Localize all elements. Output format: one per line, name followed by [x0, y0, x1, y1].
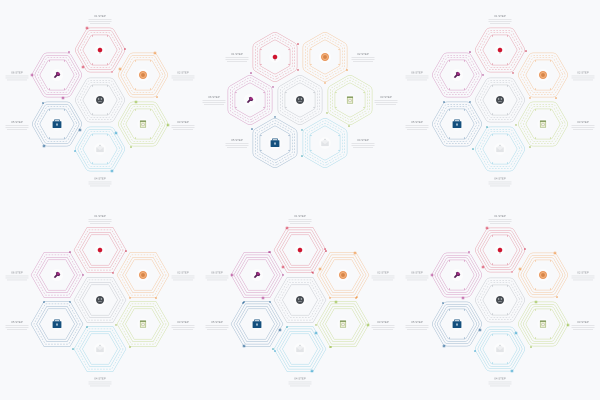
connector dots: [430, 226, 570, 373]
connector dots: [30, 26, 170, 173]
step label 06: [202, 95, 226, 105]
step label 02: [372, 270, 394, 280]
hexagon: bottom, teal: [475, 327, 525, 371]
hexagon: top, red: [475, 228, 525, 272]
step label 05: 05 STEP: [411, 120, 423, 124]
step label 06: [406, 270, 428, 280]
step label 06: 06 STEP: [411, 270, 423, 274]
step label 04: [88, 176, 112, 186]
step label 04: [288, 376, 312, 386]
hexagon: bottom, teal: [74, 326, 126, 372]
hexagon: upper right, orange: [518, 53, 568, 97]
step label 01: [88, 214, 112, 224]
step label 05: 05 STEP: [11, 120, 23, 124]
step label 02: 02 STEP: [177, 270, 189, 274]
step label 03: 03 STEP: [177, 320, 189, 324]
step label 01: [288, 214, 312, 224]
hexagon: upper left, purple: [32, 53, 82, 97]
connector dots: [230, 226, 370, 373]
step label 01: 01 STEP: [94, 214, 106, 218]
step label 03: [172, 320, 194, 330]
hexagon: lower right, green: [317, 302, 369, 346]
step label 05: [406, 120, 428, 130]
step label 03: [572, 320, 594, 330]
step label 05: [206, 320, 228, 330]
step label 01: [488, 14, 512, 24]
hexagon: bottom right, teal: [303, 118, 347, 168]
step label 01: [226, 52, 248, 62]
step label 03: [372, 320, 394, 330]
step label 06: [6, 270, 28, 280]
hexagon: right, green: [328, 75, 372, 125]
step label 03: 03 STEP: [377, 320, 389, 324]
hexagon: upper right, orange: [118, 53, 168, 97]
step label 04: 04 STEP: [357, 138, 369, 142]
hexagon: lower left, blue: [432, 102, 482, 146]
step label 04: [488, 376, 512, 386]
hexagon: top, red: [74, 228, 126, 272]
hexagon: lower right, green: [117, 302, 169, 346]
panel: top-left infographic, rounded hexagons: [6, 14, 194, 186]
hexagon: center: [274, 278, 326, 322]
step label 01: 01 STEP: [94, 14, 106, 18]
step label 02: 02 STEP: [577, 70, 589, 74]
step label 03: [374, 95, 398, 105]
hexagon: upper right, orange: [518, 253, 568, 297]
step label 06: 06 STEP: [11, 270, 23, 274]
step label 04: 04 STEP: [494, 376, 506, 380]
hexagon: left, purple: [228, 75, 272, 125]
hexagon: top left, red: [253, 32, 297, 82]
step label 03: 03 STEP: [577, 120, 589, 124]
hexagon: bottom, teal: [75, 127, 125, 171]
connector dots: [43, 250, 157, 350]
step label 06: 06 STEP: [208, 95, 220, 99]
hexagon: lower left, blue: [432, 302, 482, 346]
hexagon: center: [475, 78, 525, 122]
step label 05: [406, 320, 428, 330]
step label 06: 06 STEP: [211, 270, 223, 274]
hexagon: lower left, blue: [231, 302, 283, 346]
connector dots: [443, 50, 557, 150]
hexagon: lower left, blue: [31, 302, 83, 346]
hexagon: center: [475, 278, 525, 322]
step label 01: 01 STEP: [494, 214, 506, 218]
step label 05: 05 STEP: [11, 320, 23, 324]
step label 02: [352, 52, 374, 62]
hexagon: upper left, purple: [432, 253, 482, 297]
step label 06: [406, 70, 428, 80]
step label 03: 03 STEP: [577, 320, 589, 324]
hexagon: top right, orange: [303, 32, 347, 82]
hexagon: upper right, orange: [317, 252, 369, 298]
step label 05: 05 STEP: [411, 320, 423, 324]
hexagon: upper right, orange: [117, 252, 169, 298]
step label 03: 03 STEP: [380, 95, 392, 99]
panel: top-middle infographic, pointy hexagons: [202, 32, 398, 168]
panel: bottom-left infographic, sharp hexagons: [6, 214, 194, 386]
hexagon: bottom, teal: [475, 127, 525, 171]
step label 04: 04 STEP: [494, 176, 506, 180]
step label 02: 02 STEP: [577, 270, 589, 274]
step label 04: 04 STEP: [294, 376, 306, 380]
hexagon: lower right, green: [518, 302, 568, 346]
step label 04: 04 STEP: [94, 176, 106, 180]
hexagon: bottom left, blue: [253, 118, 297, 168]
hexagon: lower left, blue: [32, 102, 82, 146]
hexagon: lower right, green: [518, 102, 568, 146]
step label 04: [88, 376, 112, 386]
step label 02: [572, 70, 594, 80]
step label 06: [6, 70, 28, 80]
step label 02: 02 STEP: [377, 270, 389, 274]
step label 01: 01 STEP: [231, 52, 243, 56]
step label 01: [488, 214, 512, 224]
step label 03: 03 STEP: [177, 120, 189, 124]
step label 02: 02 STEP: [177, 70, 189, 74]
hexagon: lower right, green: [118, 102, 168, 146]
step label 04: [488, 176, 512, 186]
step label 05: [6, 120, 28, 130]
step label 05: 05 STEP: [211, 320, 223, 324]
hexagon: bottom, teal: [274, 326, 326, 372]
step label 05: [226, 138, 248, 148]
step label 04: [352, 138, 374, 148]
panel: bottom-middle infographic, sharp solid hexagons: [206, 214, 394, 386]
step label 04: 04 STEP: [94, 376, 106, 380]
step label 02: [172, 70, 194, 80]
step label 06: 06 STEP: [11, 70, 23, 74]
step label 02: 02 STEP: [357, 52, 369, 56]
hexagon: upper left, purple: [31, 252, 83, 298]
step label 03: [172, 120, 194, 130]
connector dots: [250, 43, 350, 157]
panel: top-right infographic, rounded dashed hexagons: [406, 14, 594, 186]
hexagon: upper left, purple: [432, 53, 482, 97]
step label 01: [88, 14, 112, 24]
step label 01: 01 STEP: [494, 14, 506, 18]
step label 06: 06 STEP: [411, 70, 423, 74]
step label 05: [6, 320, 28, 330]
hexagon: top, red: [274, 228, 326, 272]
hexagon: top, red: [475, 28, 525, 72]
hexagon: center: [278, 75, 322, 125]
step label 03: [572, 120, 594, 130]
hexagon: center: [74, 278, 126, 322]
step label 06: [206, 270, 228, 280]
step label 05: 05 STEP: [231, 138, 243, 142]
panel: bottom-right infographic, rounded solid hexagons: [406, 214, 594, 386]
hexagon: center: [75, 78, 125, 122]
step label 02: [172, 270, 194, 280]
hexagon: top, red: [75, 28, 125, 72]
step label 01: 01 STEP: [294, 214, 306, 218]
hexagon: upper left, purple: [231, 252, 283, 298]
step label 02: [572, 270, 594, 280]
